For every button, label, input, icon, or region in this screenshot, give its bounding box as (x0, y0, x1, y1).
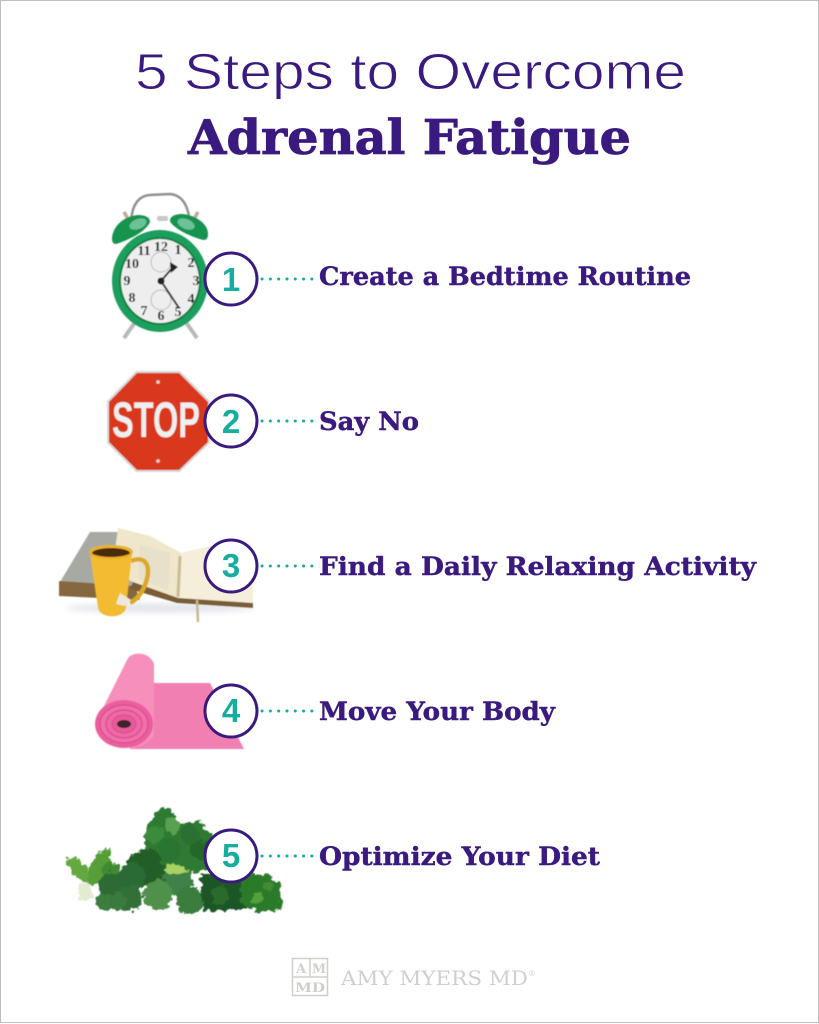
step 1 number badge (205, 253, 257, 305)
step 3 label: Find a Daily Relaxing Activity (319, 552, 758, 581)
footer logo: Amy Myers MD (292, 958, 535, 996)
logo mark: MD (295, 981, 325, 996)
icon: alarm clock (112, 194, 208, 338)
step 2 number badge (205, 395, 257, 447)
step 5 number badge (205, 830, 257, 882)
icon: alarm clock: 8 (128, 291, 136, 306)
icon: alarm clock: 3 (192, 274, 200, 289)
step 5 connector (262, 854, 313, 858)
step 2: say no (107, 371, 210, 472)
icon: leafy greens (66, 808, 282, 914)
step 1 connector (262, 278, 313, 280)
icon: alarm clock: 9 (124, 274, 130, 289)
step 5: optimize your diet (66, 808, 282, 914)
footer logo: Amy Myers MD: ® (529, 969, 535, 978)
step 2 number badge: 2 (222, 403, 240, 440)
logo mark: A (295, 962, 307, 977)
icon: alarm clock: 7 (140, 304, 148, 319)
icon: alarm clock: 11 (137, 244, 151, 259)
step 3 connector (262, 564, 313, 568)
icon: open book and mug (59, 528, 255, 622)
icon: alarm clock: 5 (174, 305, 182, 320)
step 5 number badge: 5 (222, 837, 240, 874)
step 2 connector (262, 420, 313, 422)
icon: alarm clock: 1 (174, 243, 182, 258)
icon: stop sign: STOP (112, 392, 200, 448)
step 1 label: Create a Bedtime Routine (319, 262, 691, 291)
step 2 label: Say No (319, 407, 419, 436)
step 4 label: Move Your Body (319, 697, 557, 726)
title (135, 43, 686, 166)
step 1 number badge: 1 (222, 261, 240, 298)
step 3: find a daily relaxing activity (59, 528, 255, 622)
icon: alarm clock: 2 (188, 256, 194, 271)
step 5 label: Optimize Your Diet (319, 842, 600, 871)
icon: alarm clock: 10 (125, 257, 139, 272)
step 4 connector (262, 710, 313, 712)
step 3 number badge: 3 (222, 547, 240, 584)
logo wordmark: AMY MYERS MD (340, 966, 528, 990)
step 4 number badge: 4 (222, 692, 241, 729)
logo mark: M (312, 962, 326, 977)
step 1: create a bedtime routine (112, 194, 208, 338)
step 4: move your body (95, 654, 244, 749)
step 4 number badge (205, 685, 257, 737)
icon: alarm clock: 4 (188, 292, 194, 307)
step 3 number badge (205, 540, 257, 592)
title: 5 Steps to Overcome (135, 43, 686, 100)
icon: alarm clock: 12 (154, 240, 168, 255)
title: Adrenal Fatigue (187, 110, 631, 166)
icon: pink yoga mat (95, 654, 244, 749)
logo mark (292, 958, 328, 996)
icon: alarm clock: 6 (158, 309, 164, 324)
